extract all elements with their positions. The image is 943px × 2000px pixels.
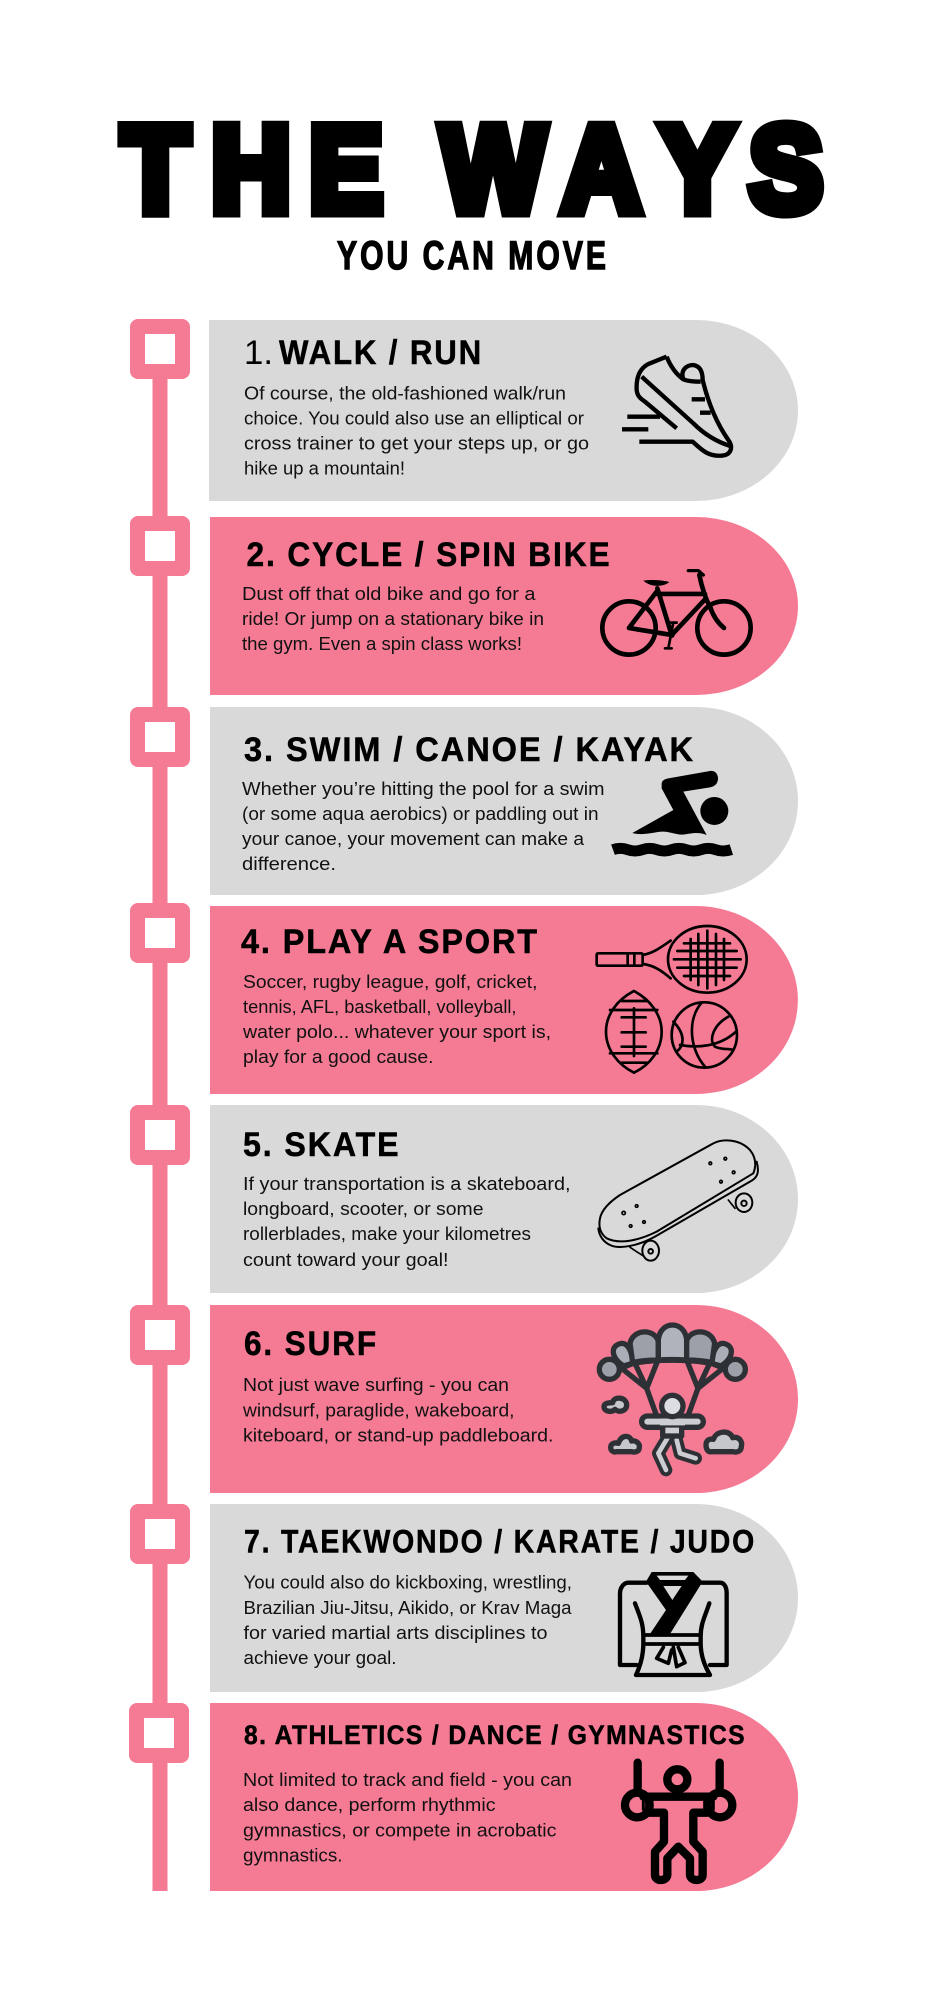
- text: play a sport: [242, 972, 551, 1067]
- timeline node 4: [130, 903, 190, 963]
- icon: skateboard: [598, 1140, 758, 1261]
- text: surf: kiteboard, or stand-up paddleboard.: [243, 1426, 554, 1446]
- timeline: [129, 319, 190, 1891]
- text: athletics / dance / gymnastics: gymnastics.: [243, 1846, 342, 1866]
- text: surf: [242, 1375, 554, 1446]
- text: walk / run: cross trainer to get your steps up, or go: [244, 434, 589, 454]
- text: skate: If your transportation is a skateboard,: [243, 1174, 570, 1194]
- text: taekwondo / karate / judo: achieve your goal.: [244, 1648, 396, 1668]
- text: play a sport: play for a good cause.: [243, 1047, 434, 1067]
- text: swim / canoe / kayak: difference.: [242, 854, 336, 874]
- text: skate: count toward your goal!: [243, 1250, 448, 1270]
- heading: walk / run: 1.: [244, 334, 273, 372]
- text: walk / run: Of course, the old-fashioned walk/run: [244, 384, 566, 404]
- timeline node 1: [130, 319, 190, 379]
- timeline node 3: [130, 707, 190, 767]
- icon: gymnast on rings: [625, 1763, 732, 1880]
- text: skate: longboard, scooter, or some: [243, 1199, 484, 1219]
- panel: skate: [210, 1105, 798, 1293]
- text: walk / run: hike up a mountain!: [244, 458, 405, 478]
- heading: walk / run: WALK / RUN: [279, 334, 483, 372]
- icon: swimmer: [613, 771, 731, 851]
- title: THEWAYS: [122, 101, 823, 237]
- heading: taekwondo / karate / judo: 7. TAEKWONDO / KARATE / JUDO: [244, 1524, 756, 1560]
- timeline node 6: [130, 1305, 190, 1365]
- text: taekwondo / karate / judo: You could also do kickboxing, wrestling,: [244, 1572, 572, 1592]
- heading: surf: 6. SURF: [244, 1325, 378, 1363]
- heading: cycle / spin bike: 2. CYCLE / SPIN BIKE: [246, 536, 612, 574]
- panel: cycle / spin bike: [210, 517, 798, 695]
- panel: walk / run: [209, 320, 798, 501]
- text: play a sport: water polo... whatever your sport is,: [242, 1022, 551, 1042]
- text: athletics / dance / gymnastics: Not limited to track and field - you can: [243, 1770, 572, 1790]
- heading: athletics / dance / gymnastics: 8. ATHLETICS / DANCE / GYMNASTICS: [244, 1720, 746, 1750]
- panel: taekwondo / karate / judo: [210, 1504, 798, 1692]
- text: swim / canoe / kayak: (or some aqua aerobics) or paddling out in: [242, 804, 598, 824]
- text: walk / run: [244, 384, 589, 478]
- timeline node 7: [130, 1504, 190, 1564]
- icon: tennis racket: [597, 926, 747, 993]
- heading: play a sport: 4. PLAY A SPORT: [241, 923, 539, 961]
- text: play a sport: Soccer, rugby league, golf, cricket,: [243, 972, 538, 992]
- text: taekwondo / karate / judo: [244, 1572, 573, 1668]
- text: surf: Not just wave surfing - you can: [243, 1375, 509, 1395]
- text: taekwondo / karate / judo: Brazilian Jiu-Jitsu, Aikido, or Krav Maga: [244, 1598, 573, 1618]
- text: skate: [243, 1174, 570, 1270]
- heading: swim / canoe / kayak: 3. SWIM / CANOE / KAYAK: [244, 731, 695, 769]
- text: athletics / dance / gymnastics: also dance, perform rhythmic: [243, 1795, 496, 1815]
- text: surf: windsurf, paraglide, wakeboard,: [242, 1400, 514, 1420]
- text: cycle / spin bike: Dust off that old bike and go for a: [242, 584, 537, 604]
- text: skate: rollerblades, make your kilometres: [243, 1224, 531, 1244]
- subtitle: YOU CAN MOVE: [337, 234, 609, 278]
- icon: basketball: [672, 1002, 737, 1068]
- timeline node 8: [129, 1703, 189, 1763]
- icon: running shoe: [622, 357, 731, 456]
- text: walk / run: choice. You could also use an elliptical or: [244, 408, 584, 428]
- text: taekwondo / karate / judo: for varied martial arts disciplines to: [244, 1623, 548, 1643]
- text: play a sport: tennis, AFL, basketball, volleyball,: [243, 997, 516, 1017]
- text: cycle / spin bike: the gym. Even a spin class works!: [242, 634, 522, 654]
- icon: football: [606, 991, 662, 1073]
- icon: bicycle: [602, 571, 751, 655]
- icon: paraglider: [599, 1325, 745, 1470]
- text: swim / canoe / kayak: [242, 779, 604, 874]
- panel: athletics / dance / gymnastics: [210, 1703, 798, 1891]
- icons: racket, football, basketball: [597, 926, 747, 1073]
- text: cycle / spin bike: ride! Or jump on a stationary bike in: [242, 609, 544, 629]
- text: athletics / dance / gymnastics: gymnastics, or compete in acrobatic: [243, 1820, 556, 1840]
- text: cycle / spin bike: [242, 584, 544, 654]
- panel: swim / canoe / kayak: [210, 707, 798, 895]
- text: swim / canoe / kayak: Whether you’re hitting the pool for a swim: [242, 779, 604, 799]
- timeline node 5: [130, 1105, 190, 1165]
- panel: surf: [210, 1305, 798, 1493]
- panel: play a sport: [210, 906, 798, 1094]
- timeline node 2: [130, 516, 190, 576]
- text: swim / canoe / kayak: your canoe, your movement can make a: [242, 829, 585, 849]
- heading: skate: 5. SKATE: [243, 1126, 400, 1164]
- text: athletics / dance / gymnastics: [243, 1770, 572, 1866]
- icon: martial arts gi: [620, 1572, 727, 1675]
